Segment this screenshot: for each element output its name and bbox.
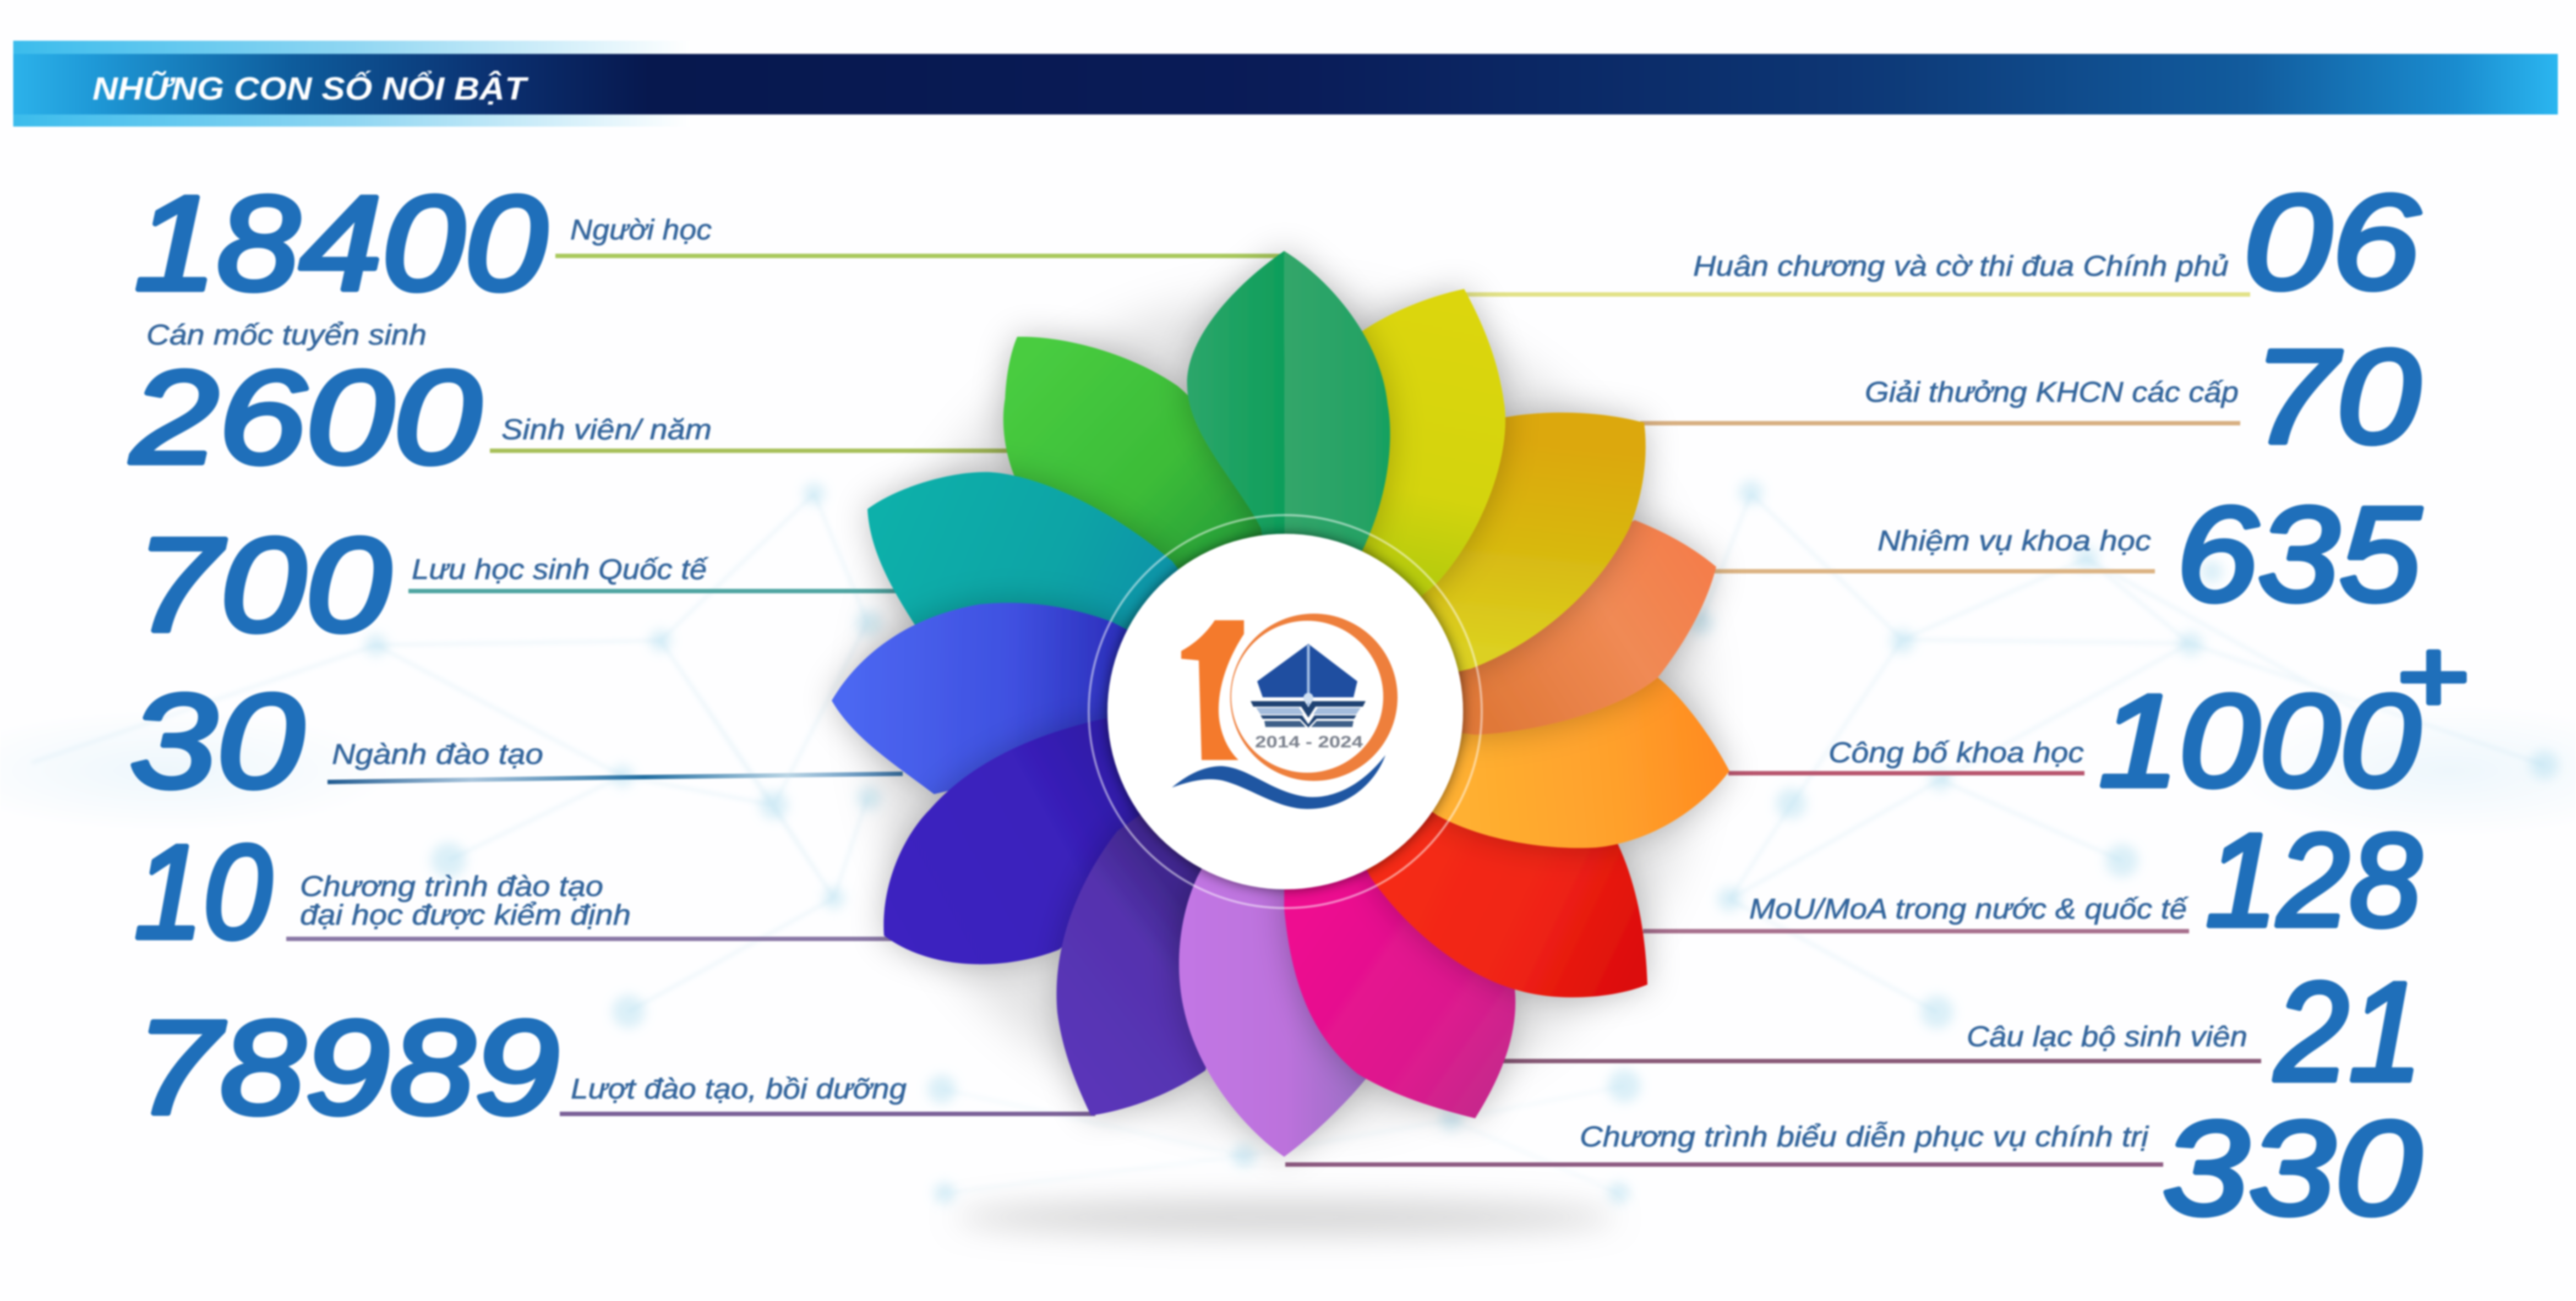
- petal: teal: [867, 472, 1285, 712]
- stat 78989: [135, 993, 907, 1142]
- stat 78989: 78989: [135, 993, 559, 1142]
- stat 128: 128: [2206, 806, 2421, 954]
- stat 06: Huân chương và cờ thi đua Chính phủ: [1693, 250, 2229, 282]
- stat 128: [1749, 806, 2421, 954]
- stat 10: đại học được kiểm định: [300, 899, 631, 931]
- hub ring: [1089, 515, 1482, 908]
- logo wave: [1172, 755, 1385, 809]
- stat 30: Ngành đào tạo: [332, 739, 543, 770]
- stat 2600: Sinh viên/ năm: [501, 414, 712, 446]
- petal: lilac: [1179, 712, 1371, 1157]
- stat 70: Giải thưởng KHCN các cấp: [1865, 376, 2239, 408]
- stat 70: 70: [2253, 322, 2420, 471]
- logo years: 2014 - 2024: [1255, 733, 1363, 751]
- petal: orange: [1285, 677, 1729, 848]
- stat 78989: Lượt đào tạo, bồi dưỡng: [571, 1073, 907, 1105]
- logo boat: [1251, 644, 1366, 728]
- stat 06: [1693, 167, 2420, 317]
- stat 2600: Cán mốc tuyển sinh: [146, 319, 427, 351]
- stat 10: Chương trình đào tạo: [300, 871, 603, 903]
- stat 1000+: [1829, 618, 2468, 814]
- petal: lime: [1285, 289, 1505, 712]
- petal: blue: [832, 603, 1285, 794]
- petal: dark green: [1187, 251, 1390, 712]
- stat 30: 30: [130, 667, 304, 816]
- stat 1000+: +: [2395, 618, 2468, 735]
- stat 635: [1878, 479, 2421, 629]
- logo ring 0: [1230, 614, 1398, 781]
- flower outer soft shadow: [867, 293, 1704, 1130]
- stat 10: 10: [134, 818, 272, 966]
- stat 10: [134, 818, 631, 966]
- petal: coral: [1285, 520, 1716, 735]
- header title: NHỮNG CON SỐ NỔI BẬT: [92, 71, 529, 107]
- stat 18400: Người học: [570, 214, 712, 246]
- petal: red: [1285, 712, 1647, 997]
- stat 70: [1865, 322, 2420, 471]
- hub white circle: [1107, 534, 1463, 889]
- stat 635: Nhiệm vụ khoa học: [1878, 525, 2151, 557]
- stat 128: MoU/MoA trong nước & quốc tế: [1749, 893, 2188, 925]
- header bar: [13, 41, 2558, 127]
- stat 21: [1967, 953, 2422, 1111]
- stat 21: Câu lạc bộ sinh viên: [1967, 1021, 2247, 1053]
- logo: [1172, 614, 1398, 809]
- stat 1000+: 1000: [2099, 668, 2420, 814]
- background network pattern: [0, 480, 2576, 1204]
- stat 2600: [130, 319, 712, 491]
- stat 700: Lưu học sinh Quốc tế: [412, 554, 708, 586]
- stat 330: 330: [2163, 1094, 2421, 1243]
- logo numeral 1: [1181, 620, 1244, 760]
- stat 635: 635: [2176, 479, 2421, 629]
- petal: indigo: [883, 712, 1285, 964]
- stat 1000+: Công bố khoa học: [1829, 737, 2084, 769]
- flower diagram: [832, 251, 1729, 1157]
- stat 330: [1580, 1094, 2421, 1243]
- stat 21: 21: [2274, 953, 2422, 1111]
- stat 18400: [134, 168, 712, 318]
- stat 06: 06: [2244, 167, 2420, 317]
- stat 700: [135, 511, 708, 659]
- stat 30: [130, 667, 543, 816]
- stat 700: 700: [135, 511, 391, 659]
- petal: green: [1003, 337, 1285, 712]
- petal: magenta: [1284, 712, 1515, 1118]
- connector lines: [286, 256, 2261, 1165]
- petal: gold: [1285, 413, 1646, 712]
- petal: purple: [1056, 712, 1285, 1116]
- panel: right statistics: [1580, 167, 2468, 1243]
- stat 18400: 18400: [134, 168, 547, 318]
- panel: left statistics: [130, 168, 907, 1142]
- ground shadow under flower: [955, 1200, 1616, 1235]
- stat 2600: 2600: [130, 343, 481, 491]
- stat 330: Chương trình biểu diễn phục vụ chính trị: [1580, 1121, 2149, 1153]
